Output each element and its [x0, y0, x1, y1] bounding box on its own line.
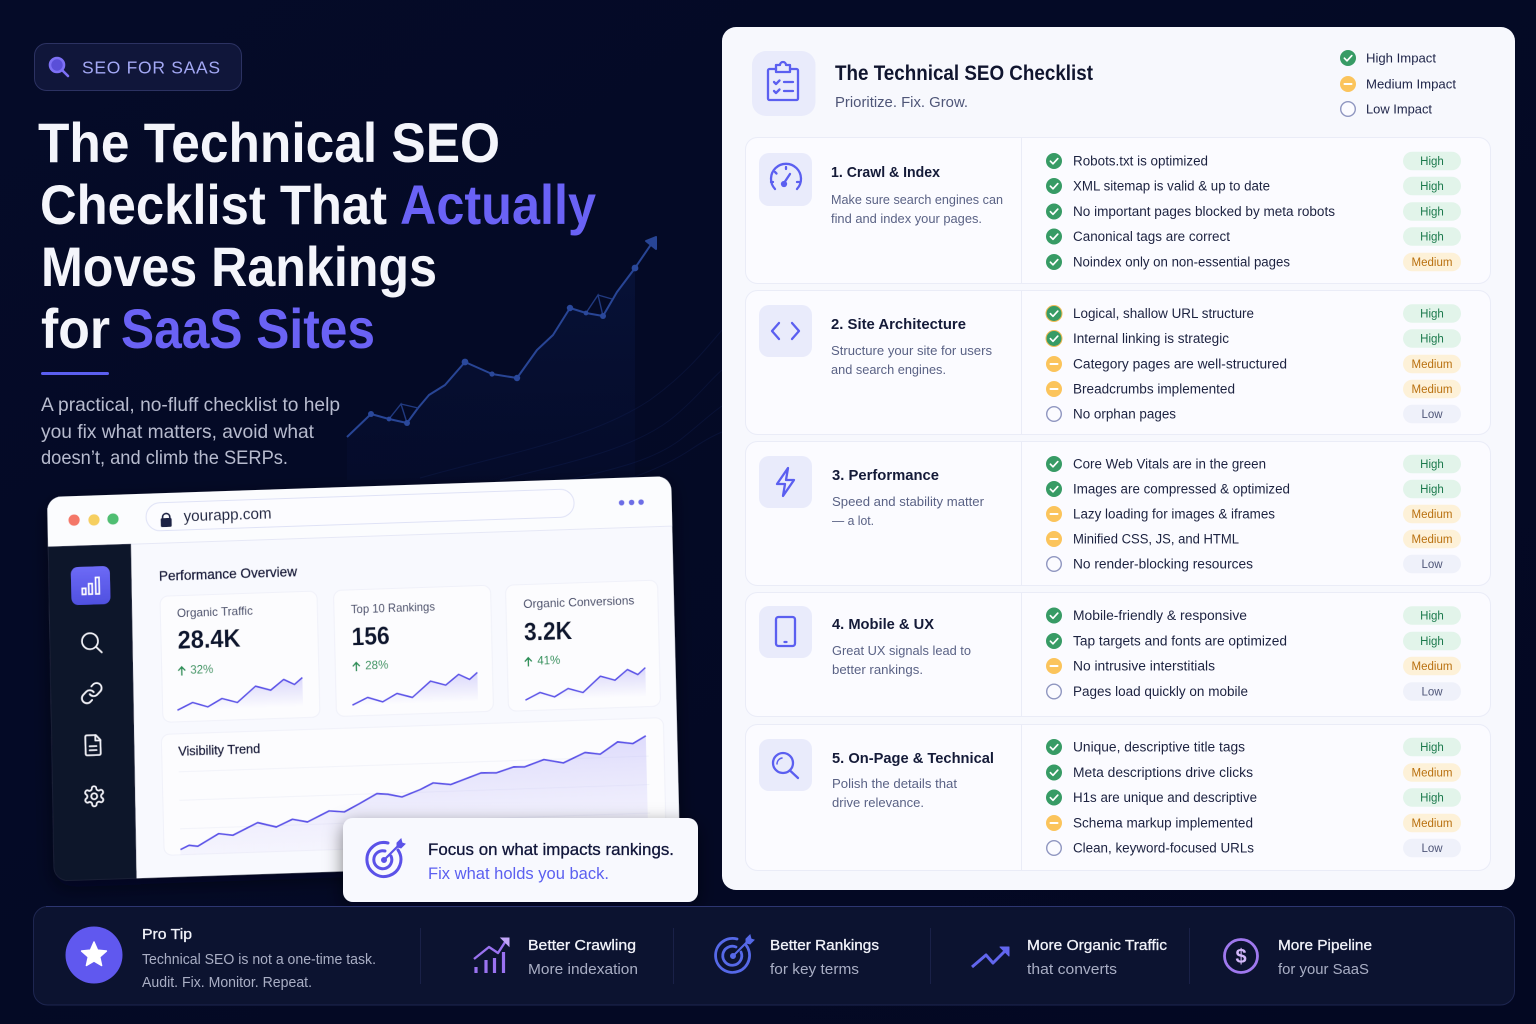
section 5: on-page and technical: drive relevance. [832, 795, 924, 810]
section 3: performance: 3. Performance [832, 467, 939, 484]
icon: star [66, 926, 122, 984]
benefit: better rankings: Better Rankings [770, 937, 879, 954]
checklist items: Tap targets and fonts are optimized [1073, 634, 1287, 649]
checklist items: H1s are unique and descriptive [1073, 790, 1257, 805]
icon: target [716, 935, 754, 972]
icon: chart growth [474, 938, 509, 973]
stat card: organic conversions [505, 580, 661, 711]
section 4: mobile and UX: 4. Mobile & UX [832, 616, 934, 633]
title underline [41, 372, 109, 375]
checklist items: Internal linking is strategic [1073, 331, 1229, 346]
icon: target [367, 839, 405, 876]
heading: checklist title: The Technical SEO Checklist [835, 62, 1093, 85]
chart card: visibility trend: Visibility Trend [178, 741, 260, 759]
callout: focus on rankings: Focus on what impacts rankings. [428, 840, 674, 859]
benefit: better crawling: More indexation [528, 962, 638, 978]
browser window body [45, 476, 680, 881]
section 4: mobile and UX: better rankings. [832, 662, 923, 677]
stat card: top 10 rankings [333, 585, 493, 716]
stat card: organic traffic: Organic Traffic [177, 604, 253, 620]
benefit: better crawling: Better Crawling [528, 937, 636, 954]
title: Moves Rankings [41, 235, 437, 298]
benefit: more organic traffic: More Organic Traffic [1027, 937, 1168, 954]
icon: lightning bolt [759, 456, 812, 508]
section 2: site architecture [746, 290, 1490, 434]
section 2: site architecture: and search engines. [831, 362, 946, 377]
checklist items: Unique, descriptive title tags [1073, 740, 1245, 755]
section 4: mobile and UX: Great UX signals lead to [832, 643, 971, 658]
section 1: crawl and index [746, 138, 1490, 284]
stat card: top 10 rankings: Top 10 Rankings [351, 600, 435, 616]
benefit: more pipeline [1224, 937, 1372, 978]
checklist items: No important pages blocked by meta robots [1073, 204, 1335, 219]
icon: clipboard [752, 51, 816, 116]
checklist items: Clean, keyword-focused URLs [1073, 841, 1254, 856]
checklist items [1046, 455, 1461, 573]
icon: gear [85, 786, 103, 807]
section 1: crawl and index: Make sure search engines can [831, 192, 1003, 207]
checklist items: No render-blocking resources [1073, 557, 1253, 572]
section 1: crawl and index: find and index your pages. [831, 211, 982, 226]
icon: mobile device [759, 606, 812, 658]
title: Checklist That [40, 173, 387, 236]
section 1: crawl and index: 1. Crawl & Index [831, 164, 941, 181]
checklist items: Mobile-friendly & responsive [1073, 608, 1247, 623]
background rising line chart with arrow [347, 237, 722, 482]
icon: search [82, 633, 102, 653]
stat card: top 10 rankings: 28% [365, 660, 388, 672]
badge: SEO for SaaS [34, 44, 242, 90]
benefit: more pipeline: More Pipeline [1278, 937, 1372, 954]
title: SaaS Sites [121, 297, 375, 360]
intro paragraph: doesn’t, and climb the SERPs. [41, 447, 288, 469]
intro paragraph: A practical, no-fluff checklist to help [41, 394, 340, 416]
legend: High Impact [1366, 50, 1436, 66]
section 4: mobile and UX [746, 592, 1490, 716]
subtitle: Prioritize. Fix. Grow. [835, 94, 968, 111]
callout: focus on rankings: Fix what holds you back. [428, 864, 609, 883]
legend [1340, 50, 1456, 116]
sidebar [46, 544, 139, 881]
pro tip [66, 926, 376, 991]
benefit: better rankings [716, 935, 879, 978]
checklist items: Images are compressed & optimized [1073, 482, 1290, 497]
benefit: more pipeline: for your SaaS [1278, 962, 1369, 978]
checklist items: Schema markup implemented [1073, 816, 1253, 831]
bottom bar [34, 906, 1514, 1005]
callout: focus on rankings [343, 818, 698, 902]
icon: trending arrow [972, 947, 1009, 967]
stat card: organic traffic: 32% [190, 664, 213, 677]
icon: analytics tile [71, 566, 111, 605]
stat card: organic conversions: 41% [537, 655, 560, 668]
browser header bar: yourapp.com [183, 506, 272, 525]
section 2: site architecture: Structure your site for users [831, 343, 993, 358]
checklist items: Breadcrumbs implemented [1073, 382, 1235, 397]
panel: technical SEO checklist [722, 27, 1515, 890]
stat card: organic conversions: 3.2K [524, 617, 572, 647]
checklist items: XML sitemap is valid & up to date [1073, 179, 1270, 194]
section 3: performance: Speed and stability matter [832, 494, 985, 509]
browser mockup dashboard [45, 476, 680, 881]
pro tip: Audit. Fix. Monitor. Repeat. [142, 975, 312, 991]
title: The Technical SEO [38, 111, 500, 174]
title: Actually [400, 173, 596, 236]
checklist items: Canonical tags are correct [1073, 229, 1230, 244]
browser header bar [47, 476, 672, 547]
benefit: better crawling [474, 937, 638, 978]
badge: SEO for SaaS: SEO FOR SAAS [82, 58, 221, 78]
checklist items: Lazy loading for images & iframes [1073, 507, 1275, 522]
icon: dollar coin: $ [1235, 946, 1247, 968]
heading: Performance Overview: Performance Overview [159, 564, 297, 584]
pro tip: Pro Tip [142, 926, 192, 943]
stat card: organic traffic [160, 591, 320, 722]
checklist items [1046, 152, 1461, 271]
checklist items [1046, 606, 1461, 701]
stat card: organic traffic: 28.4K [177, 625, 241, 655]
icon: magnifier [759, 739, 812, 791]
icon: search [50, 58, 68, 76]
icon: code brackets [759, 305, 812, 357]
section 3: performance [746, 442, 1490, 586]
checklist items: Core Web Vitals are in the green [1073, 457, 1266, 472]
icon: gauge [759, 153, 812, 206]
section 5: on-page and technical: Polish the details that [832, 776, 957, 791]
checklist items: Pages load quickly on mobile [1073, 684, 1248, 699]
chart card: visibility trend [161, 718, 666, 855]
stat card: top 10 rankings: 156 [351, 622, 390, 652]
icon: document [85, 735, 101, 755]
checklist items: Logical, shallow URL structure [1073, 306, 1254, 321]
benefit: more organic traffic: that converts [1027, 962, 1117, 978]
stat card: organic conversions: Organic Conversions [523, 594, 635, 611]
checklist items: Robots.txt is optimized [1073, 154, 1208, 169]
section 5: on-page and technical: 5. On-Page & Technical [832, 750, 994, 767]
checklist items: Minified CSS, JS, and HTML [1073, 532, 1239, 547]
title [38, 111, 596, 360]
section 5: on-page and technical [746, 724, 1490, 870]
checklist items: Meta descriptions drive clicks [1073, 765, 1253, 780]
pro tip: Technical SEO is not a one-time task. [142, 952, 376, 968]
intro paragraph: you fix what matters, avoid what [41, 421, 315, 443]
legend: Medium Impact [1366, 76, 1456, 92]
intro paragraph [41, 394, 340, 469]
title: for [41, 297, 110, 360]
section 2: site architecture: 2. Site Architecture [831, 316, 966, 333]
section 3: performance: — a lot. [832, 513, 874, 528]
checklist items: No intrusive interstitials [1073, 659, 1215, 674]
legend: Low Impact [1366, 102, 1432, 116]
checklist items: No orphan pages [1073, 407, 1176, 422]
checklist items: Category pages are well-structured [1073, 357, 1287, 372]
checklist items [1046, 304, 1461, 423]
checklist items: Noindex only on non-essential pages [1073, 255, 1290, 270]
checklist items [1046, 738, 1461, 857]
icon: dollar coin [1224, 940, 1258, 972]
icon: link [82, 683, 102, 703]
benefit: more organic traffic [972, 937, 1168, 978]
benefit: better rankings: for key terms [770, 962, 859, 978]
